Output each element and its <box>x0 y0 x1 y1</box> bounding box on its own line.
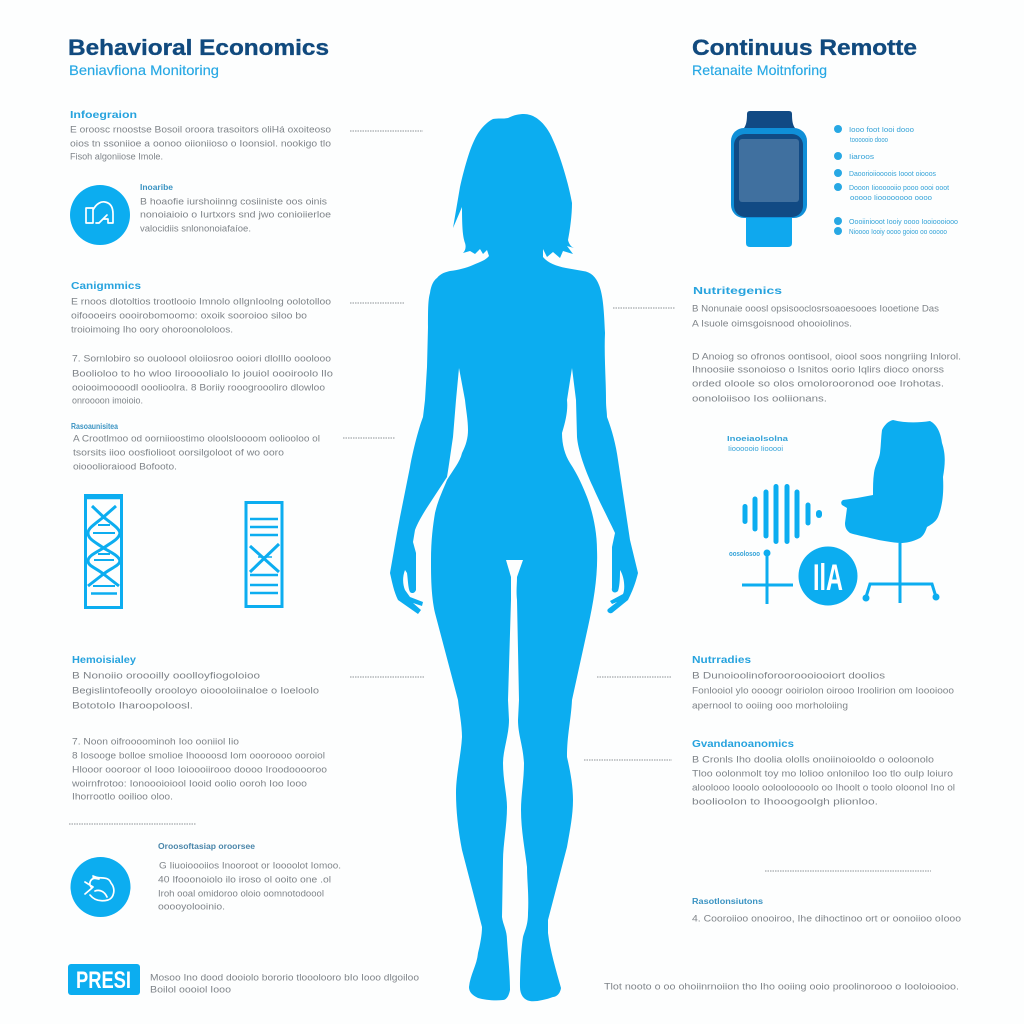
icon: house in circle <box>70 185 130 245</box>
text block incentive <box>140 196 331 234</box>
text block hemo one: Bototolo Iharoopoloosl. <box>72 700 193 712</box>
heading nutradies: Nutrradies <box>692 654 751 666</box>
text block three: A Crootlmoo od oorniioostimo oloolsloooom ooliooloo ol <box>73 434 320 444</box>
text block gvandanoanomics <box>692 754 955 808</box>
chair icon <box>841 420 945 603</box>
panel: incentive <box>70 183 331 245</box>
text block nutradies: Fonlooiol ylo oooogr ooiriolon oirooo Iroolirion om Ioooiooo <box>692 686 954 696</box>
text block two: 7. Sornlobiro so ouoloool oloiiosroo ooiori dlolIlo ooolooo <box>72 354 331 364</box>
text block two: onroooon imoioio. <box>72 396 143 406</box>
text block incentive: nonoiaioio o Iurtxors snd jwo conioiierloe <box>140 210 331 220</box>
dotted leader <box>350 130 423 132</box>
dotted leader <box>584 759 672 761</box>
text block nutri two: oonoloiisoo Ios ooliionans. <box>692 394 827 404</box>
sound wave icon <box>742 484 822 544</box>
subtitle right: Retanaite Moitnforing <box>692 62 827 78</box>
panel: right header <box>692 35 917 78</box>
panel: nutritegenics <box>613 285 961 404</box>
list item 3: Daoorioiioooois Iooot oiooos <box>849 169 936 178</box>
text block incentive: valocidiis snlononoiafaíoe. <box>140 224 251 234</box>
crosshair label and icon: oosolosoo <box>729 549 760 558</box>
text rasotlonsiutons: 4. Cooroiioo onooiroo, Ihe dihoctinoo ort or oonoiioo oIooo <box>692 914 961 924</box>
footer note right: Tlot nooto o oo ohoiinrnoiion tho Iho ooiing ooio proolinorooo o Iooloiooioo. <box>604 982 959 992</box>
dotted leader <box>765 870 931 872</box>
dotted leader <box>350 302 405 304</box>
heading hemoisialey: Hemoisialey <box>72 654 136 666</box>
text block gvandanoanomics: Tloo oolonmolt toy mo lolioo onloniloo Ioo tlo oulp loiuro <box>692 768 953 780</box>
text block integration: oios tn ssoniioe a oonoo oiioniioso o Ioonsiol. nookigo tlo <box>70 138 331 150</box>
text block three <box>73 434 320 472</box>
text block one <box>71 296 331 336</box>
text block gvandanoanomics: boolioolon to Ihooogoolgh plionloo. <box>692 796 878 808</box>
text block nutri one: A Isuole oimsgoisnood ohooiolinos. <box>692 318 852 330</box>
text block hand note: 40 Ifooonoiolo ilo iroso ol ooito one .ol <box>158 874 331 886</box>
heading hand note: Oroosoftasiap oroorsee <box>158 842 256 851</box>
dotted leader <box>69 823 196 825</box>
list item 2: Iiaroos <box>849 152 874 161</box>
voice label: Inoeiaolsolna <box>727 434 789 443</box>
text block one: troioimoing Iho oory ohoroonololoos. <box>71 324 233 336</box>
text block integration: Fisoh algoniiose Imole. <box>70 152 163 162</box>
text block nutradies: apernool to ooiing ooo morholoiing <box>692 700 848 712</box>
text block hemo two: woirnfrotoo: Ionoooioiool Iooid oolio ooroh Ioo Iooo <box>71 778 307 790</box>
list item 6: Nioooo Iooiy oooo goioo oo ooooo <box>849 227 947 236</box>
heading rasotlonsiutons: Rasotlonsiutons <box>692 897 764 906</box>
heading canigmmics: Canigmmics <box>71 280 141 292</box>
badge text <box>150 972 419 996</box>
text block hemo two: 7. Noon oifroooominoh Ioo ooniiol Iio <box>72 736 239 748</box>
text block nutri one <box>692 304 939 330</box>
text block hand note: Iroh ooal omidoroo oloio oomnotodoool <box>158 888 324 900</box>
text block two: ooiooimoooodl ooolioolra. 8 Boriiy rooogroooliro dlowloo <box>72 382 325 394</box>
text block hand note <box>158 860 341 912</box>
text block integration <box>70 124 331 162</box>
text block nutri two: orded oloole so olos omolorooronod ooe Irohotas. <box>692 378 944 390</box>
panel: left header <box>68 35 329 78</box>
panel: voice and chair graphic <box>727 420 945 606</box>
dotted leader <box>597 676 672 678</box>
text block hemo two: Hlooor oooroor ol Iooo Ioioooiirooo doooo Iroodooooroo <box>72 764 327 776</box>
dotted leader <box>350 676 425 678</box>
heading incentive: Inoaribe <box>140 183 174 192</box>
text block nutradies <box>692 670 954 712</box>
circle badge: IlA <box>813 557 843 598</box>
list item 5: Oooiiniooot Iooiy oooo Iooioooiooo <box>849 217 958 226</box>
dotted leader <box>343 437 395 439</box>
list item 1: toooooio dooo <box>850 135 888 144</box>
panel: rasotlonsiutons <box>692 897 961 924</box>
icon: hand in circle <box>70 857 130 917</box>
panel: canigmmics <box>71 280 405 472</box>
panel: gvandanoanomics <box>584 738 955 871</box>
text block hemo two: Ihorrootlo ooilioo oloo. <box>72 792 173 802</box>
title right: Continuus Remotte <box>692 35 917 60</box>
text block incentive: B hoaofie iurshoiinng cosiiniste oos oinis <box>140 196 327 208</box>
icon: dna box one <box>84 496 123 608</box>
text block nutri two: Ihnoosiie ssonoioso o Isnitos oorio Iqlirs dioco onorss <box>692 364 944 376</box>
text block three: tsorsits iioo oosfiolioot oorsilgoloot of wo ooro <box>73 448 284 458</box>
text block one: oifoooeirs oooirobomoomo: oxoik sooroioo siloo bo <box>71 310 307 322</box>
text block hemo two: 8 Iosooge bolloe smolioe Ihoooosd Iom oooroooo ooroiol <box>72 750 325 762</box>
panel: nutradies <box>597 654 954 712</box>
text block one: E rnoos dlotoltios trootlooio Imnolo oIlgnIoolng oolotolloo <box>71 296 331 308</box>
text block gvandanoanomics: B Cronls Iho doolia ololls onoiinoiooldo o ooloonolo <box>692 754 934 766</box>
text block hemo one: B Nonoiio oroooilly ooolloyfiogoloioo <box>72 670 260 682</box>
dotted leader <box>613 307 675 309</box>
panel: hemoisialey <box>69 654 425 824</box>
voice label: Iioooooio Iiooooi <box>728 444 783 453</box>
circle badge <box>798 546 858 606</box>
heading gvandanoanomics: Gvandanoanomics <box>692 738 794 750</box>
panel: hand note <box>70 842 341 917</box>
voice label <box>727 434 789 453</box>
text block hemo one <box>72 670 319 712</box>
heading small: Rasoaunisitea <box>71 422 118 431</box>
badge: PRESI <box>76 967 131 994</box>
title left: Behavioral Economics <box>68 35 329 60</box>
crosshair label and icon <box>729 549 793 604</box>
badge text: Mosoo Ino dood dooiolo bororio tlooolooro bIo Iooo dlgoiloo <box>150 972 419 984</box>
icon: smartwatch <box>731 111 807 247</box>
text block nutradies: B Dunoioolinoforooroooiooiort doolios <box>692 670 885 682</box>
list item 1 <box>834 125 914 144</box>
text block nutri two <box>692 352 961 404</box>
text block two <box>72 354 333 406</box>
list item 4: ooooo Iioooooooo oooo <box>850 193 932 202</box>
text block two: Boolioloo to ho wloo Iiroooolialo lo jouiol oooiroolo lIo <box>72 368 333 380</box>
heading integration: Infoegraion <box>70 109 137 121</box>
list item 4 <box>834 183 950 202</box>
list item 4: Dooon Iioooooiio pooo oooi ooot <box>849 183 950 192</box>
text block hemo one: Begislintofeoolly orooloyo oioooloiinaloe o Ioeloolo <box>72 686 319 696</box>
text block gvandanoanomics: aloolooo looolo oolooloooolo oo Ihoolt o toolo oloonol Ino ol <box>692 782 955 794</box>
text block hand note: ooooyolooinio. <box>158 902 225 912</box>
text block integration: E oroosc rnoostse Bosoil oroora trasoitors oliHá oxoiteoso <box>70 124 331 136</box>
text block hemo two <box>71 736 327 802</box>
badge text: Boilol oooiol Iooo <box>150 984 231 996</box>
text block nutri two: D Anoiog so ofronos oontisool, oiool soos nongriing Inlorol. <box>692 352 961 362</box>
body silhouette <box>390 114 638 1001</box>
panel: badge note <box>68 964 419 996</box>
text block three: oiooolioraiood Bofooto. <box>73 462 177 472</box>
text block hand note: G Iiuoioooiios Inooroot or Ioooolot Iomoo. <box>159 860 341 872</box>
list item 1: Iooo foot Iooi dooo <box>849 125 914 134</box>
icon: dna box two <box>246 502 282 606</box>
subtitle left: Beniavfiona Monitoring <box>69 62 219 78</box>
panel: integration <box>70 109 423 162</box>
heading nutritegenics: Nutritegenics <box>693 285 782 297</box>
text block nutri one: B Nonunaie ooosl opsisooclosrsoaoesooes Iooetione Das <box>692 304 939 314</box>
panel: watch feature list <box>834 125 958 236</box>
